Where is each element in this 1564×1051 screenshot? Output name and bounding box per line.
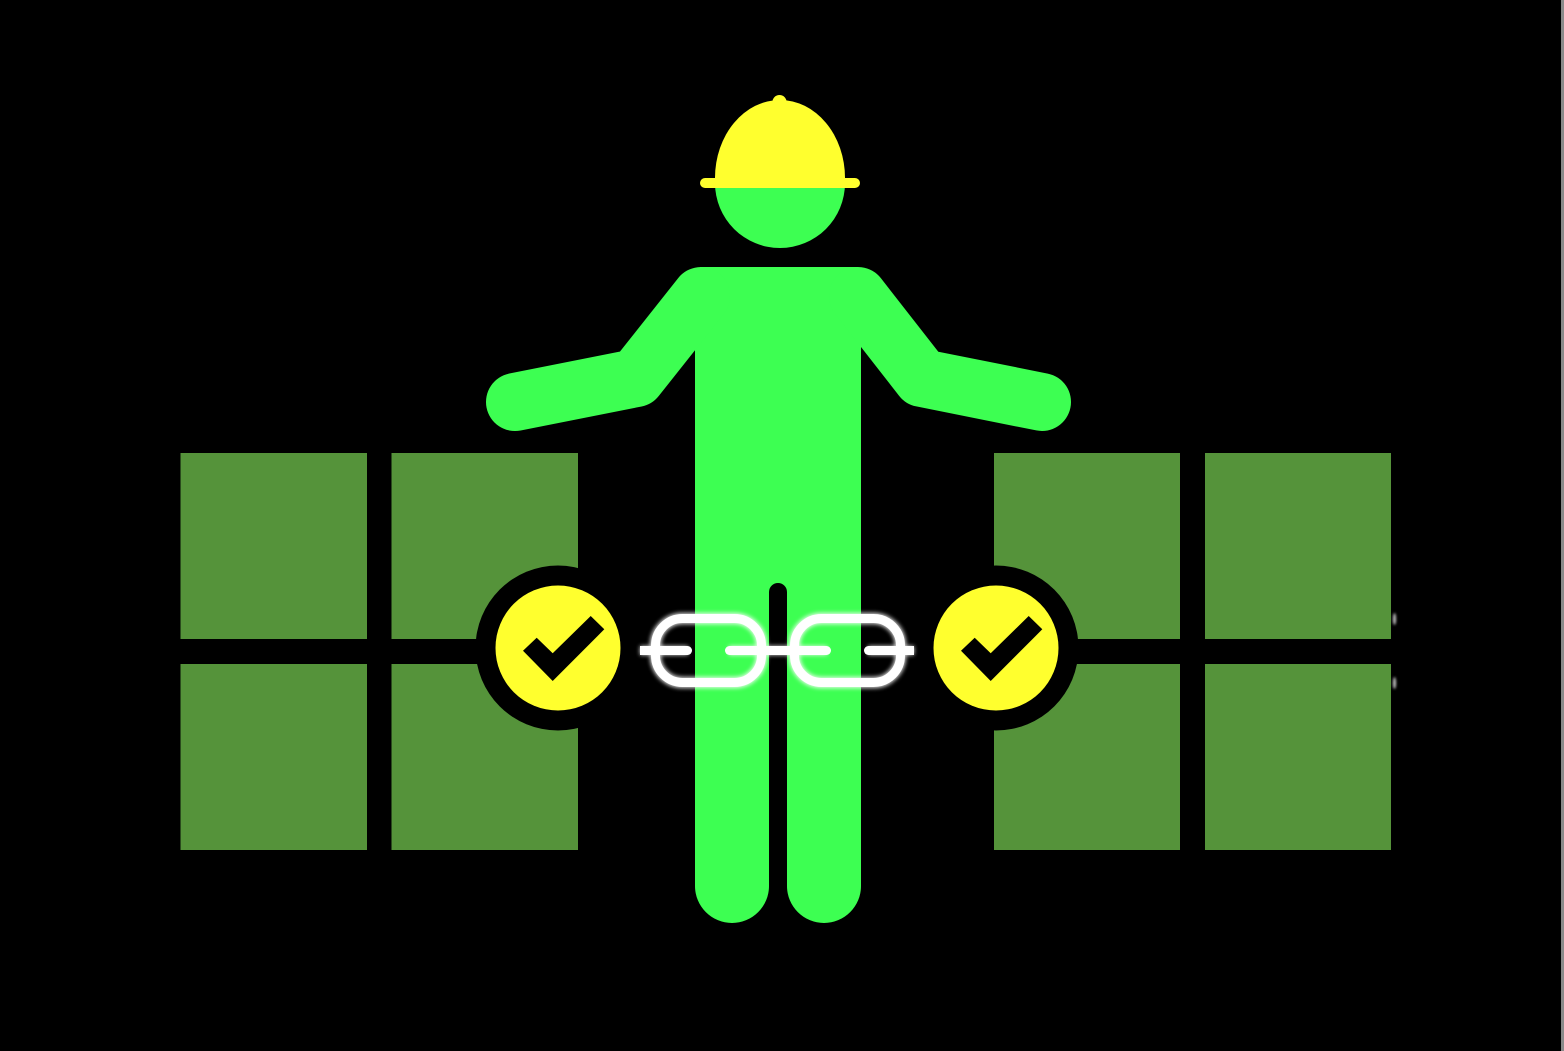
worker left arm <box>515 296 701 402</box>
icon: left check badge <box>476 566 640 730</box>
icon: faint edge glints <box>1393 613 1396 689</box>
icon: chain link <box>640 618 914 682</box>
icon: worker figure <box>515 95 1042 923</box>
icon: right check badge <box>914 566 1078 730</box>
icon: hard hat <box>700 95 860 188</box>
worker head <box>715 118 845 248</box>
panel: right solar panel grid <box>994 453 1391 850</box>
panel: left solar panel grid <box>180 453 578 850</box>
worker body and legs <box>695 267 861 923</box>
worker right arm <box>858 296 1042 402</box>
